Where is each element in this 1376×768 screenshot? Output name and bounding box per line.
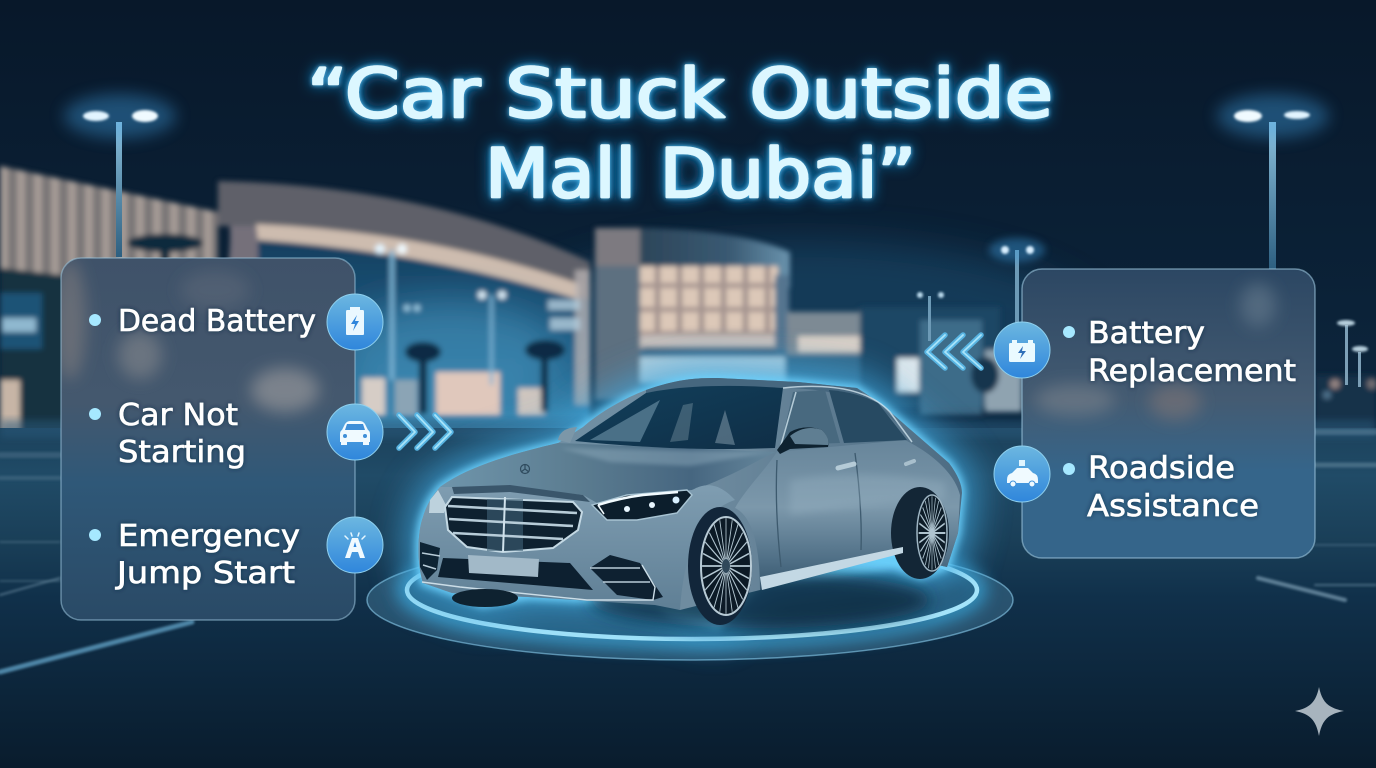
side windows — [781, 390, 840, 445]
panel: problems (left) — [54, 258, 383, 620]
item: Roadside Assistance: Assistance — [1087, 489, 1259, 524]
street lamps — [64, 94, 1368, 387]
mall buildings — [0, 166, 1376, 436]
door side panel — [735, 440, 960, 590]
item: Car Not Starting — [89, 398, 246, 470]
right mirror — [777, 427, 828, 454]
item: Roadside Assistance — [1063, 451, 1259, 524]
arrow: chevrons pointing left — [927, 335, 981, 368]
parking lot ground — [0, 428, 1376, 768]
front wheel — [688, 507, 752, 625]
rear wheel — [891, 487, 949, 579]
item: Battery Replacement: Battery — [1088, 316, 1205, 351]
car shadow — [590, 572, 930, 628]
icon: car battery — [994, 322, 1050, 378]
icon: car — [327, 404, 383, 460]
hood emblem — [520, 464, 530, 474]
title: Mall Dubai” — [485, 135, 916, 214]
central building — [595, 228, 643, 400]
left mirror — [558, 427, 577, 443]
front fascia — [418, 485, 735, 610]
windshield — [575, 386, 783, 449]
item: Emergency Jump Start: Emergency — [118, 519, 300, 554]
roof — [646, 378, 905, 430]
item: Battery Replacement: Replacement — [1088, 354, 1296, 389]
arrow: chevrons pointing right — [399, 415, 451, 448]
car — [418, 378, 962, 628]
item: Roadside Assistance: Roadside — [1088, 451, 1235, 486]
item: Emergency Jump Start: Jump Start — [115, 556, 295, 591]
item: Battery Replacement — [1063, 316, 1296, 389]
car glow halo — [418, 378, 962, 625]
item: Dead Battery: Dead Battery — [118, 304, 316, 339]
item: Car Not Starting: Starting — [118, 435, 246, 470]
item: Car Not Starting: Car Not — [118, 398, 238, 433]
front left tire — [452, 589, 518, 607]
right distance — [1315, 375, 1376, 430]
title: “Car Stuck Outside — [307, 55, 1053, 134]
chrome sill — [760, 547, 903, 590]
car body — [418, 378, 962, 610]
icon: jump start — [327, 517, 383, 573]
left headlight — [429, 490, 446, 513]
hood lip shadow — [452, 485, 590, 502]
lower air intake — [438, 558, 593, 590]
icon: battery — [327, 294, 383, 350]
grille — [445, 497, 582, 552]
headlight — [592, 490, 692, 520]
item: Emergency Jump Start — [89, 519, 300, 591]
parking lines — [0, 432, 1376, 672]
panel: solutions (right) — [994, 269, 1315, 558]
title — [307, 55, 1053, 214]
side highlight — [790, 474, 945, 515]
icon: car with tow hook — [994, 446, 1050, 502]
hood — [440, 443, 775, 503]
platform under car — [367, 540, 1013, 660]
icon: sparkle watermark — [1295, 687, 1344, 736]
license plate — [468, 555, 539, 577]
door lines and handles — [776, 453, 914, 567]
